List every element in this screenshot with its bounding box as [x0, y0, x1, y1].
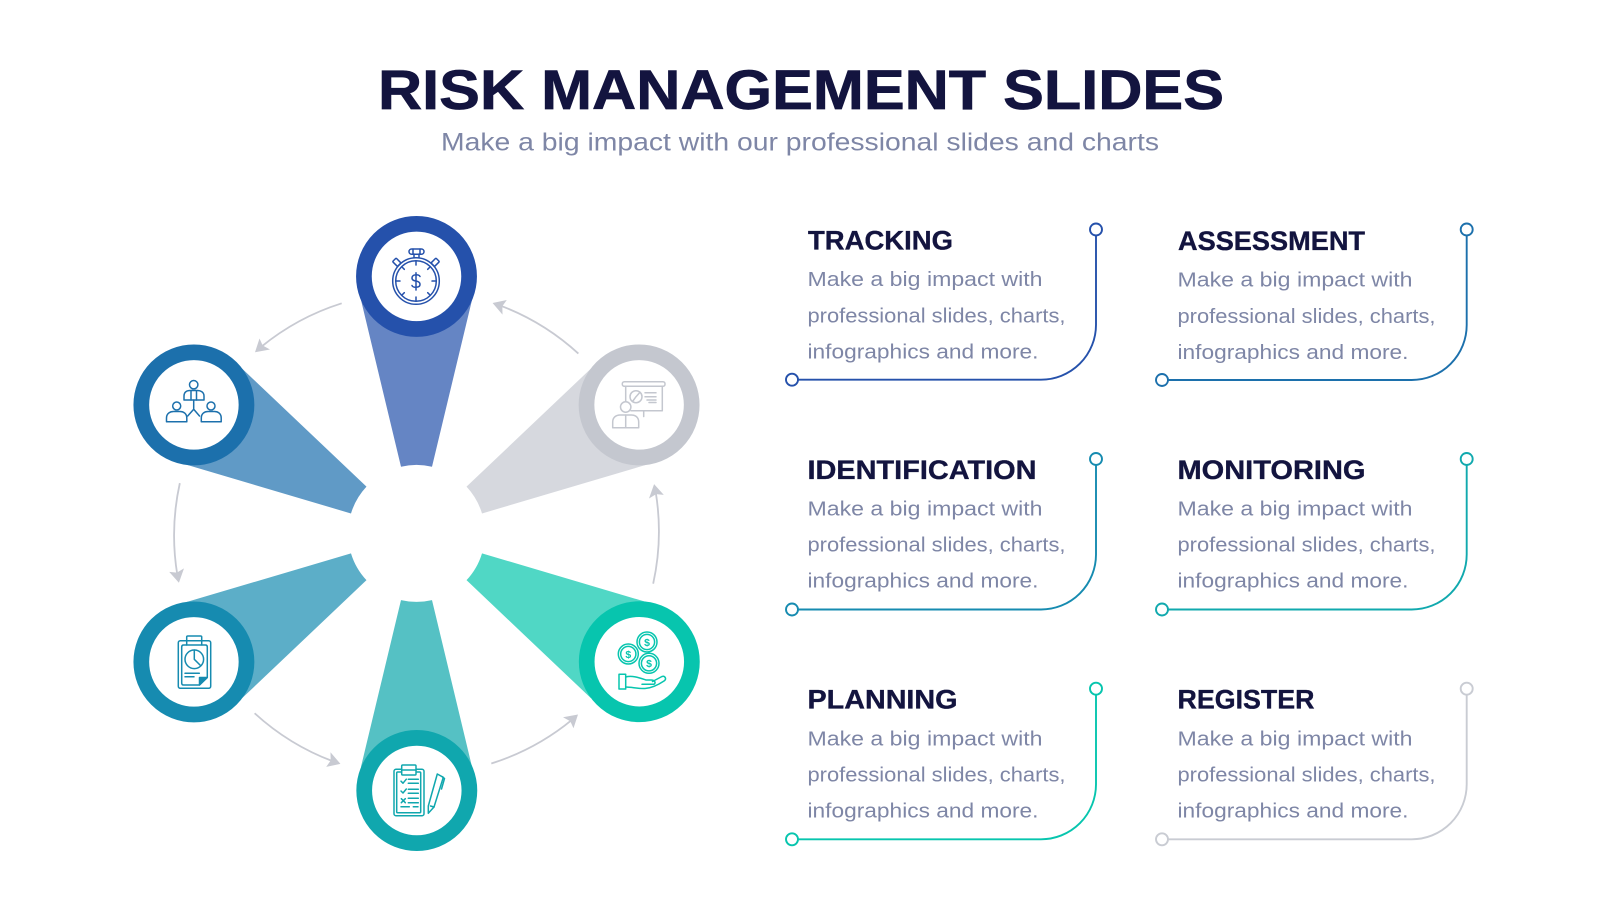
card: identification: infographics and more.	[808, 571, 1038, 593]
coin dollar signs: $	[644, 637, 650, 649]
card: monitoring: MONITORING	[1178, 455, 1366, 485]
card: tracking: Make a big impact with	[808, 269, 1042, 291]
arrow: planning to monitoring	[491, 715, 578, 764]
card: identification	[786, 453, 1102, 616]
card: identification: professional slides, charts,	[808, 535, 1066, 557]
arrow: assessment to identification	[136, 483, 222, 583]
coin dollar signs	[625, 637, 652, 670]
card: identification: IDENTIFICATION	[808, 455, 1036, 485]
icon: stopwatch	[393, 249, 439, 304]
card: tracking	[786, 224, 1102, 386]
card: planning: infographics and more.	[808, 801, 1038, 823]
card: assessment: ASSESSMENT	[1178, 226, 1365, 256]
card: tracking: professional slides, charts,	[808, 305, 1066, 327]
card: assessment	[1156, 224, 1473, 386]
icon: presenter with board	[613, 382, 665, 428]
title: RISK MANAGEMENT SLIDES	[378, 58, 1224, 121]
card: planning	[786, 683, 1102, 845]
card: planning: PLANNING	[808, 685, 958, 715]
segment: identification	[141, 519, 386, 715]
icon: checklist and pen	[394, 765, 444, 816]
arrow: tracking to assessment	[255, 303, 342, 352]
segment: monitoring	[447, 519, 692, 714]
card: monitoring: Make a big impact with	[1178, 498, 1412, 520]
card: identification: Make a big impact with	[808, 498, 1042, 520]
segment: register	[447, 352, 692, 548]
segment: planning	[361, 600, 472, 843]
wheel diagram	[141, 224, 692, 843]
card: monitoring: professional slides, charts,	[1178, 535, 1436, 557]
card: monitoring: infographics and more.	[1178, 571, 1408, 593]
coin dollar signs: $	[646, 658, 652, 670]
card: assessment: professional slides, charts,	[1178, 306, 1436, 328]
card: planning: Make a big impact with	[808, 728, 1042, 750]
card: assessment: Make a big impact with	[1178, 270, 1412, 292]
segment: assessment	[141, 352, 386, 548]
segment: tracking	[361, 224, 472, 467]
card: tracking: infographics and more.	[808, 341, 1038, 363]
card: planning: professional slides, charts,	[808, 765, 1066, 787]
icon: coins and hand	[618, 632, 665, 689]
icon: team hierarchy	[166, 380, 221, 422]
card: tracking: TRACKING	[808, 226, 953, 256]
arrow: monitoring to register	[611, 484, 697, 584]
card: register	[1156, 683, 1473, 845]
cycle arrows	[136, 278, 697, 788]
card: assessment: infographics and more.	[1178, 342, 1408, 364]
card: register: professional slides, charts,	[1178, 765, 1436, 787]
icon: clipboard report	[178, 636, 211, 688]
card: register: Make a big impact with	[1178, 728, 1412, 750]
arrow: register to tracking	[493, 278, 578, 378]
card: register: infographics and more.	[1178, 801, 1408, 823]
coin dollar signs: $	[625, 649, 631, 661]
card: monitoring	[1156, 453, 1473, 616]
subtitle: Make a big impact with our professional slides and charts	[441, 129, 1159, 157]
arrow: identification to planning	[255, 689, 340, 788]
card: register: REGISTER	[1178, 685, 1314, 715]
